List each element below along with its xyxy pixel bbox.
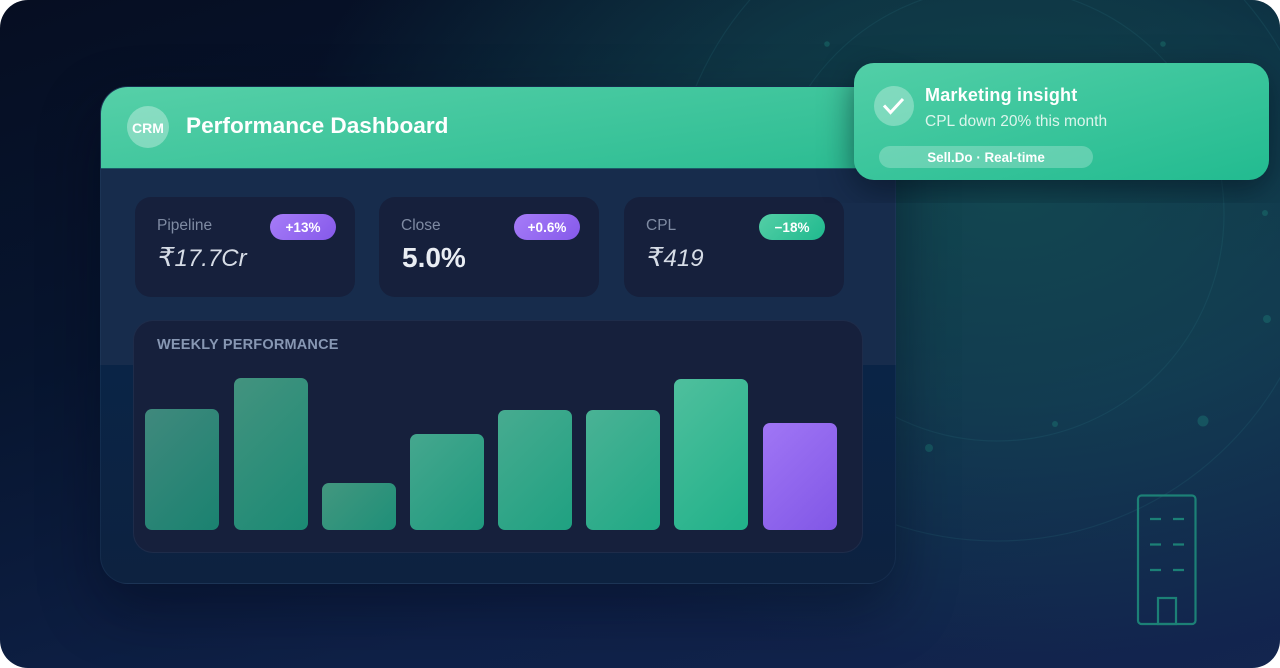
panel: dashboard card <box>100 86 896 584</box>
tag: Sell.Do · Real-time <box>927 150 1045 165</box>
value: ₹419 <box>647 243 704 273</box>
panel: weekly performance chart <box>133 320 863 553</box>
toast title: Marketing insight <box>925 85 1077 105</box>
bar 4 <box>410 434 484 530</box>
header bar <box>100 86 898 169</box>
icon: CRM badge: CRM <box>132 120 164 136</box>
KPI card: Pipeline <box>135 197 355 297</box>
badge <box>759 214 825 240</box>
toast text: CPL down 20% this month <box>925 113 1107 130</box>
chart title: WEEKLY PERFORMANCE <box>157 337 339 353</box>
bar 5 <box>498 410 572 530</box>
KPI card: CPL <box>624 197 844 297</box>
label: Close <box>401 217 441 234</box>
heading: Performance Dashboard: Performance Dashboard <box>186 113 448 138</box>
bar 1 <box>145 408 219 530</box>
bar 2 <box>234 378 308 530</box>
badge: −18% <box>775 220 809 235</box>
KPI card: Close <box>379 197 599 297</box>
value: 5.0% <box>402 242 466 273</box>
toast shadow <box>832 62 1279 202</box>
callout: marketing insight toast <box>854 63 1269 180</box>
badge: +13% <box>286 220 320 235</box>
bar 7 <box>674 379 748 530</box>
badge <box>514 214 580 240</box>
icon: CRM badge <box>127 106 169 148</box>
label: Pipeline <box>157 217 212 234</box>
bar 3 <box>322 482 396 530</box>
label: CPL <box>646 217 676 234</box>
bar 8 <box>763 423 837 530</box>
bar 6 <box>586 410 660 530</box>
icon: check <box>874 86 914 126</box>
icon: building <box>1136 494 1197 626</box>
badge <box>270 214 336 240</box>
badge: +0.6% <box>528 220 566 235</box>
tag <box>879 146 1093 168</box>
value: ₹17.7Cr <box>158 243 247 273</box>
